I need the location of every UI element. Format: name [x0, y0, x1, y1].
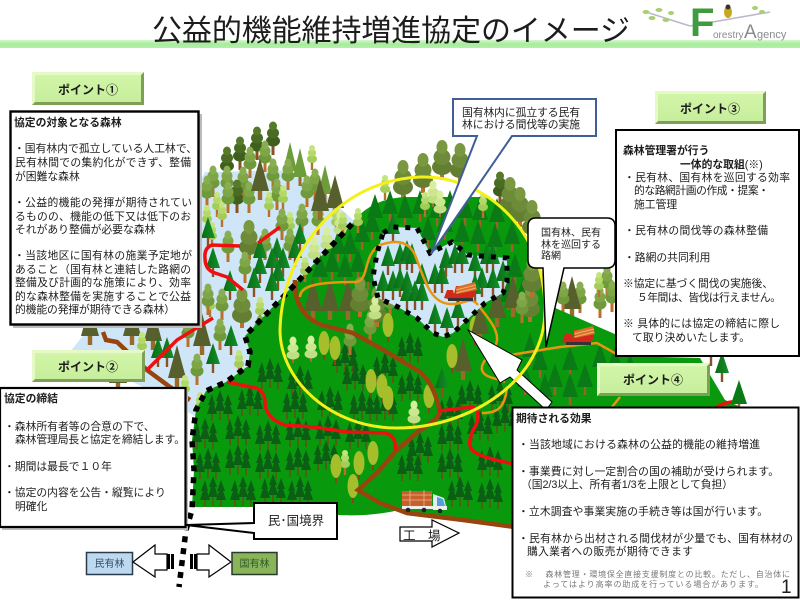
panel: forest office integrated work: 施工管理	[634, 197, 677, 211]
right side firs	[704, 336, 747, 412]
panel: expected effects: 購入業者への販売が期待できます	[527, 544, 693, 558]
panel: forest office integrated work: ※協定に基づく間伐の実施後、	[623, 276, 773, 290]
legend: national forest	[232, 552, 277, 574]
panel: expected effects: 期待される効果	[516, 411, 592, 425]
private forest ground	[70, 170, 355, 420]
callout: forest road network: 国有林、民有	[541, 226, 601, 239]
panel: forest office integrated work: ・路網の共同利用	[624, 250, 710, 264]
button: point 2: ポイント②	[58, 360, 118, 374]
brown main road	[295, 280, 515, 527]
panel: forest office integrated work: ・民有林、国有林を巡回する効率	[624, 170, 790, 184]
page number: 1	[781, 577, 792, 598]
national forest hill	[192, 197, 770, 560]
panel: target forests: あること（国有林と連結した路網の	[15, 262, 191, 276]
panel: expected effects: ・事業費に対し一定割合の国の補助が受けられます。	[518, 464, 779, 478]
panel: expected effects: ・当該地域における森林の公益的機能の維持増進	[518, 437, 760, 451]
button: point 4	[597, 363, 710, 396]
button: point 1	[32, 72, 144, 105]
red roads	[147, 227, 745, 464]
legend: private forest	[86, 552, 132, 574]
panel: agreement conclusion: ・森林所有者等の合意の下で、	[4, 419, 155, 433]
callout: forest road network: 路網	[541, 249, 561, 262]
panel: target forests: ・国有林内で孤立している人工林で、	[14, 141, 197, 155]
panel: forest office integrated work: ※ 具体的には協定の締結に際し	[623, 316, 780, 330]
logo: Forestry Agency: gency	[757, 29, 787, 41]
callout: boundary label: 民･国境界	[268, 514, 325, 528]
panel: forest office integrated work: ・民有林の間伐等の森林整備	[624, 223, 768, 237]
panel: forest office integrated work: 一体的な取組(※)	[680, 157, 763, 171]
isolated private forest patch	[373, 213, 510, 337]
panel: target forests: それがあり整備が必要な森林	[15, 222, 156, 236]
callout: boundary label	[186, 503, 337, 539]
panel: expected effects: （国2/3以上、所有者1/3を上限として負担）	[521, 477, 733, 491]
panel: target forests: 民有林間での集約化ができず、整備	[15, 155, 191, 169]
panel: forest office integrated work: 的な路網計画の作成・提案・	[634, 183, 769, 197]
landscape illustration	[70, 122, 770, 587]
callout: forest road network: 林を巡回する	[541, 238, 601, 251]
panel: target forests	[10, 112, 202, 328]
boundary-side and mid-slope trees	[286, 175, 542, 503]
panel: agreement conclusion: 明確化	[15, 500, 48, 513]
panel: forest office integrated work: て取り決めいたします。	[632, 331, 750, 344]
lower small firs	[192, 332, 518, 509]
button: point 4: ポイント④	[623, 373, 683, 387]
panel: expected effects: よってはより高率の助成を行っている場合があります。	[543, 579, 763, 589]
panel: target forests: 的機能の発揮が期待できる森林）	[15, 302, 175, 316]
truck in patch	[444, 282, 477, 301]
panel: expected effects	[512, 408, 798, 598]
panel: agreement conclusion: 森林管理局長と協定を締結します。	[15, 432, 185, 446]
panel: agreement conclusion: ・期間は最長で１０年	[4, 459, 112, 473]
orange forest road network	[300, 242, 620, 413]
panel: forest office integrated work: ５年間は、皆伐は行えません。	[637, 290, 781, 304]
callout: isolated private forest: 林における間伐等の実施	[462, 117, 580, 131]
panel: agreement conclusion	[0, 388, 188, 530]
arrow: to factory	[400, 520, 459, 547]
logo: Forestry Agency	[642, 1, 787, 45]
logo: Forestry Agency: orestry	[713, 30, 744, 41]
panel: target forests: ・当該地区に国有林の施業予定地が	[14, 248, 192, 262]
arrow: expected effects pointing to patch	[468, 330, 552, 410]
callout: isolated private forest	[431, 99, 596, 254]
legend: national forest: 国有林	[240, 557, 270, 570]
logo: Forestry Agency: F	[690, 1, 714, 45]
callout: isolated private forest: 国有林内に孤立する民有	[462, 105, 580, 119]
button: point 1: ポイント①	[58, 83, 118, 97]
panel: expected effects: ・民有林から出材される間伐材が少量でも、国有林材の	[518, 531, 793, 545]
title band	[0, 40, 800, 48]
panel: target forests: が困難な森林	[15, 169, 80, 183]
arrow: to factory: 工 場	[403, 529, 441, 543]
private forest trees	[81, 122, 344, 417]
logo: Forestry Agency: A	[744, 22, 757, 43]
legend: private forest: 民有林	[94, 557, 124, 570]
button: point 3: ポイント③	[680, 102, 740, 116]
panel: target forests: 協定の対象となる森林	[14, 115, 122, 129]
private and national boundary dotted line	[179, 224, 352, 587]
truck on network road	[562, 326, 595, 345]
callout: forest road network	[528, 218, 615, 347]
log truck on main road	[402, 490, 447, 513]
panel: target forests: 的な森林整備を実施することで公益	[15, 289, 191, 303]
panel: expected effects: ※ 森林管理・環境保全直接支援制度との比較。ただし、自治体に	[525, 569, 790, 579]
olive treeline behind national forest	[393, 140, 618, 318]
arrow: towards private forest	[133, 545, 174, 577]
panel: expected effects: ・立木調査や事業実施の手続き等は国が行います。	[518, 504, 768, 518]
panel: agreement conclusion: 協定の締結	[4, 391, 58, 405]
panel: target forests: ・公益的機能の発揮が期待されてい	[14, 195, 192, 209]
title: 公益的機能維持増進協定のイメージ	[152, 15, 630, 48]
arrow: towards national forest	[190, 545, 231, 577]
yellow circle	[280, 177, 545, 428]
panel: target forests: るものの、機能の低下又は低下のお	[15, 209, 191, 223]
upper firs on national forest	[312, 190, 638, 405]
panel: forest office integrated work: 森林管理署が行う	[623, 143, 709, 157]
panel: forest office integrated work	[616, 130, 799, 356]
panel: target forests: 整備及び計画的な施策により、効率	[15, 275, 191, 289]
button: point 3	[655, 91, 766, 124]
panel: agreement conclusion: ・協定の内容を公告・縦覧により	[4, 485, 166, 499]
button: point 2	[32, 350, 145, 382]
